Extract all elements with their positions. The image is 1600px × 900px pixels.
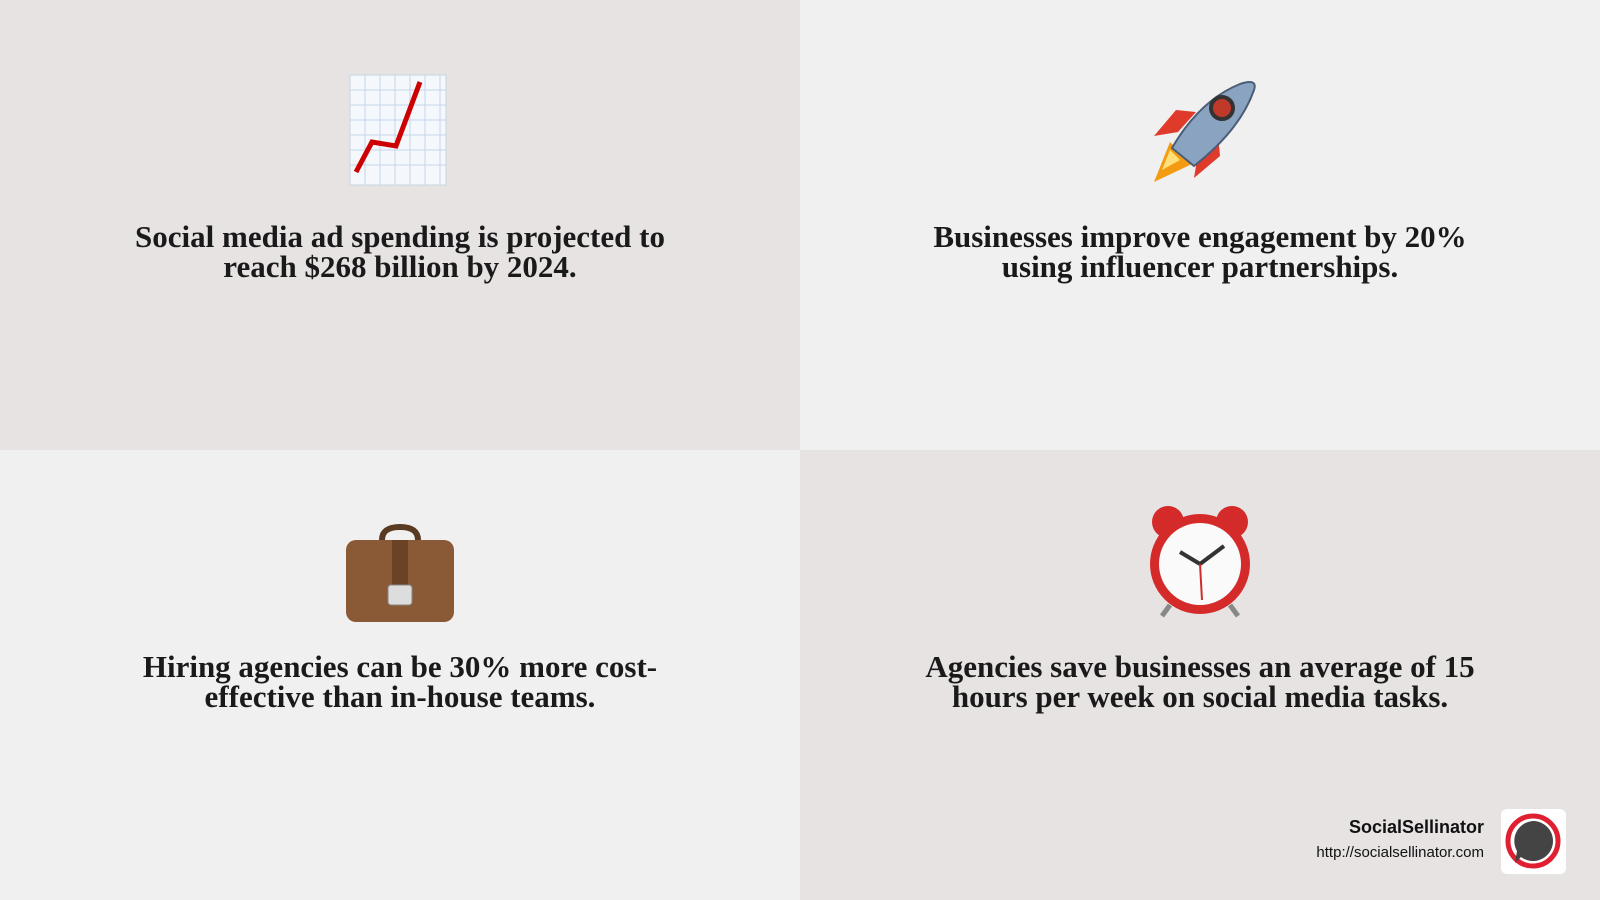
panel: ad spending — [0, 0, 800, 450]
text: time stat — [925, 649, 1475, 714]
text: ad spending stat: reach $268 billion by 2024. — [223, 249, 577, 284]
icon: chart — [350, 74, 446, 186]
text: time stat: Agencies save businesses an average of 15 — [925, 649, 1475, 684]
icon: alarm clock — [1150, 506, 1250, 618]
panel: cost-effective — [0, 450, 800, 900]
text: ad spending stat: Social media ad spending is projected to — [135, 219, 665, 254]
text: cost stat — [143, 649, 657, 714]
brand: name and url: SocialSellinator — [1349, 817, 1484, 837]
icon: briefcase — [346, 524, 454, 622]
text: cost stat: Hiring agencies can be 30% more cost- — [143, 649, 657, 684]
text: engagement stat — [933, 219, 1467, 284]
logo — [1501, 809, 1566, 874]
text: time stat: hours per week on social media tasks. — [952, 679, 1448, 714]
text: engagement stat: using influencer partnerships. — [1002, 249, 1398, 284]
panel: time saved — [800, 450, 1600, 900]
brand: name and url — [1316, 817, 1484, 861]
text: ad spending stat — [135, 219, 665, 284]
text: cost stat: effective than in-house teams. — [205, 679, 595, 714]
text: engagement stat: Businesses improve engagement by 20% — [933, 219, 1467, 254]
brand: name and url: http://socialsellinator.com — [1316, 844, 1484, 861]
icon: rocket — [1154, 81, 1256, 182]
panel: engagement — [800, 0, 1600, 450]
